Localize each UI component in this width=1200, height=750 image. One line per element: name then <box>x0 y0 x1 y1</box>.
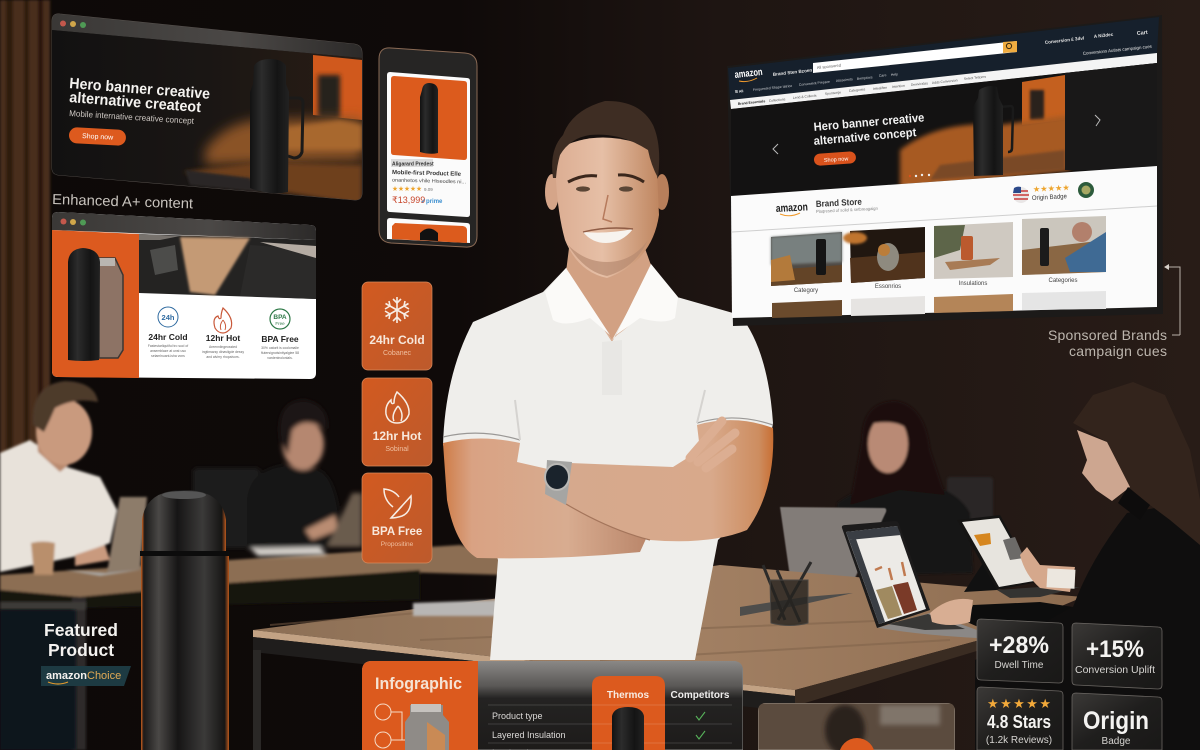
A+ lifestyle photo <box>139 234 316 299</box>
category thumbnail 1 <box>771 232 842 294</box>
main person: polo collar and placket <box>443 264 773 440</box>
phone listing text: ✓prime <box>421 199 443 205</box>
TV shop now button: Shop now <box>824 156 849 164</box>
search bar: All sponsored <box>817 62 841 70</box>
shop now button: Shop now <box>82 133 114 142</box>
colleague: woman in black foreground <box>930 382 1200 750</box>
main person: neck and head <box>545 101 669 340</box>
main wooden table <box>253 565 1083 750</box>
A+ feature BPA free: Free <box>275 321 285 326</box>
A+ feature 12hr hot <box>202 308 244 359</box>
comparison headers <box>592 676 730 750</box>
A+ feature 24hr cold: ansemblaze at unst uso <box>150 349 186 353</box>
feature tile: 12hr hot: Sobinal <box>385 446 409 453</box>
A+ feature 24hr cold: selamlnuant-isha vons <box>151 354 185 358</box>
category thumbnail 4 <box>1022 216 1106 284</box>
search bar <box>813 41 1017 73</box>
phone listing text: ★★★★★ <box>392 185 422 193</box>
carousel arrows and dots <box>773 115 1100 177</box>
icon: snowflake <box>385 297 409 323</box>
A+ feature BPA free <box>261 309 299 360</box>
feature tile: 24hr cold: Cobanec <box>383 350 412 357</box>
hero copy: Hero banner creative <box>69 75 211 103</box>
TV hero banner <box>731 60 1157 196</box>
white sub nav: Intention <box>892 84 905 89</box>
phone listing text: Aligarard Predest <box>392 162 434 168</box>
feature tile: BPA free <box>362 473 432 563</box>
category thumbnail 2: Essonrios <box>875 284 901 290</box>
white sub nav: Lend & Collects <box>793 94 817 100</box>
brand store heading: amazon <box>776 201 808 215</box>
stat card: origin badge: Origin <box>1083 707 1149 735</box>
white sub nav: Brand Essentials <box>738 99 766 106</box>
origin badge row: ★★★★★ <box>1033 183 1070 194</box>
nav links: Care <box>879 73 887 78</box>
stat card: dwell time <box>977 619 1063 683</box>
icon: leaf <box>384 489 411 518</box>
main person: crossed arms <box>443 420 773 558</box>
brand store heading <box>776 197 878 216</box>
tablet on stand <box>957 515 1080 598</box>
A+ feature BPA free: flutersignotsinityalgiee 58 <box>261 351 299 355</box>
category thumbnail 3: Insulations <box>959 281 987 287</box>
comparison rows: Layered Insulation <box>492 730 566 740</box>
orange infographic side: Infographic <box>375 675 462 693</box>
open laptop with store page <box>842 521 977 638</box>
phone listing text: Mobile-first Product Elle <box>392 170 462 178</box>
featured product label: Choice <box>87 670 121 682</box>
white sub nav: Adds Conversion <box>932 78 958 85</box>
video thumbnail card <box>758 703 955 750</box>
stat card: origin badge <box>1072 693 1162 750</box>
mobile phone card <box>379 48 477 247</box>
white sub nav: Dewviciday <box>911 81 928 87</box>
A+ feature BPA free: BPA Free <box>261 334 299 344</box>
grey laptop back <box>780 507 886 578</box>
nav links: Convenient Prepare <box>799 80 830 87</box>
store divider <box>732 206 1157 232</box>
enhanced A+ browser card <box>52 212 316 379</box>
white sub nav: Categories <box>849 87 866 93</box>
A+ window buttons <box>60 218 86 226</box>
window buttons <box>60 20 86 28</box>
phone second card <box>387 218 470 243</box>
phone listing text <box>391 159 466 205</box>
main person: shirt <box>443 263 773 660</box>
shop now button <box>69 127 126 146</box>
colleague: woman seated at right <box>837 401 993 575</box>
header account text: A Ni3dec <box>1094 32 1114 39</box>
nav links <box>735 72 898 94</box>
nav links: Frequented Shape Iatrice <box>753 84 792 92</box>
feature tile: BPA free: BPA Free <box>372 526 422 538</box>
brand store heading: Plaqresed of solid & setbreagaign <box>816 206 878 214</box>
phone product card <box>387 72 470 217</box>
A+ feature 24hr cold <box>148 307 188 358</box>
hero thermos <box>250 59 303 193</box>
TV hero thermos <box>973 86 1013 176</box>
icon: flame <box>386 392 409 423</box>
second row of thumbnails <box>772 291 1106 318</box>
header account text: Brand Sten Bzoen <box>773 68 813 77</box>
TV hero copy: alternative concept <box>813 125 917 148</box>
feature tile: 24hr cold <box>362 282 432 370</box>
A+ feature BPA free: vardeninolonials. <box>267 356 293 360</box>
colleague: woman at left desk <box>193 400 362 556</box>
stat card: star rating: 4.8 Stars <box>987 712 1051 732</box>
featured product label: amazon <box>46 670 87 682</box>
sponsored brands annotation: Sponsored Brands <box>1048 327 1167 343</box>
feature tile: 24hr cold: 24hr Cold <box>369 333 425 347</box>
wristwatch <box>545 460 572 505</box>
background desk left <box>0 545 505 750</box>
hero copy: alternative createot <box>69 89 202 116</box>
stat card: star rating <box>977 687 1063 750</box>
sponsored brands annotation: campaign cues <box>1069 343 1167 359</box>
hero banner browser card <box>52 14 362 205</box>
play button <box>839 738 875 750</box>
wood slat curtain <box>0 0 50 455</box>
comparison rows: Product type <box>492 711 543 721</box>
stat card: dwell time: +28% <box>989 632 1049 659</box>
header account text: Cart <box>1137 30 1148 37</box>
feature tile: 12hr hot: 12hr Hot <box>373 429 421 443</box>
phone listing text: onanhetos vhile Hiseodles ni... <box>392 178 466 185</box>
A+ feature BPA free: 30% oatorit is coolomalie <box>261 346 299 350</box>
infographic comparison panel <box>362 661 743 750</box>
feature tile: 12hr hot <box>362 378 432 466</box>
header account text: Conversions Autists campaign cues <box>1083 44 1153 56</box>
A+ feature BPA free: BPA <box>273 314 287 321</box>
featured product label <box>41 620 131 686</box>
hero scene <box>52 30 362 205</box>
stat card: dwell time: Dwell Time <box>995 660 1044 671</box>
category thumbnail 1: Category <box>794 288 818 294</box>
pen holder <box>763 562 811 626</box>
A+ feature 12hr hot: ingtimazsy dinaviigde dessy <box>202 350 244 354</box>
header account text: Conversion £ 3dvl <box>1045 36 1084 45</box>
stat card: origin badge: Badge <box>1102 736 1131 747</box>
A+ feature 12hr hot: Areennlingeossted <box>209 345 237 349</box>
brand store white page <box>731 166 1157 318</box>
featured product label: Product <box>48 640 114 660</box>
comparison rows <box>492 711 705 750</box>
stat card: conversion uplift <box>1072 623 1162 689</box>
sponsored brands annotation <box>1048 264 1180 359</box>
A+ feature 12hr hot: 12hr Hot <box>206 333 240 343</box>
TV bezel <box>727 15 1163 326</box>
white sub nav: Select Tettoms <box>964 75 986 81</box>
category thumbnail 2 <box>843 227 925 290</box>
stat card: star rating: (1.2k Reviews) <box>986 735 1052 746</box>
A+ title bar <box>52 212 316 240</box>
origin badge row <box>1013 182 1094 203</box>
stat card: star rating: ★★★★★ <box>987 696 1051 711</box>
nav links: Help <box>891 72 898 77</box>
TV shop now button <box>814 151 856 166</box>
wall TV with brand store <box>727 15 1163 326</box>
nav links: Atisseients <box>836 77 853 83</box>
white sub nav: Sponsorge <box>825 90 842 96</box>
A+ feature 24hr cold: 24h <box>162 313 175 322</box>
header account text <box>773 30 1153 77</box>
amazon logo: amazon <box>734 67 763 81</box>
comparison headers: Competitors <box>671 690 730 701</box>
Amazon navy header <box>728 17 1159 100</box>
hero copy <box>69 75 211 126</box>
feature tile: BPA free: Propositine <box>381 541 414 548</box>
hero copy: Mobile internative creative concept <box>69 108 195 126</box>
A+ feature 12hr hot: and alvirry rhopaivors. <box>206 355 240 359</box>
white sub nav: Collections <box>769 97 786 103</box>
comparison headers: Thermos <box>607 690 650 701</box>
large featured thermos <box>140 490 229 750</box>
white sub nav <box>730 53 1157 109</box>
category thumbnail 4: Categories <box>1048 278 1078 284</box>
amazon logo <box>734 67 763 82</box>
brand store heading: Brand Store <box>816 197 862 209</box>
nav links: ☰ All <box>735 88 744 94</box>
stat card: conversion uplift: Conversion Uplift <box>1075 665 1155 676</box>
TV hero copy <box>813 110 925 148</box>
enhanced A+ content label: Enhanced A+ content <box>52 192 193 212</box>
orange infographic side <box>362 661 478 750</box>
A+ feature 24hr cold: 24hr Cold <box>148 332 188 342</box>
main person: hand fingers <box>690 421 735 468</box>
TV hero copy: Hero banner creative <box>813 110 925 134</box>
phone listing text: 9.09 <box>424 187 433 192</box>
A+ orange side panel with thermos <box>52 230 139 378</box>
category thumbnail 3 <box>934 222 1013 287</box>
origin badge row: Origin Badge <box>1032 193 1067 202</box>
phone listing text: ₹13,999 <box>392 195 425 205</box>
mini thermos <box>612 707 644 750</box>
phone orange product image <box>391 76 467 160</box>
featured product label: Featured <box>44 620 118 640</box>
colleague: man in white shirt <box>0 381 147 750</box>
desk mat <box>740 593 853 616</box>
card title bar <box>52 14 362 58</box>
A+ feature 24hr cold: Fastestarliqutiful tro sucl of <box>148 344 188 348</box>
stat card: conversion uplift: +15% <box>1086 636 1144 663</box>
nav links: Bemptiors <box>857 75 873 81</box>
white sub nav: Infealifise <box>873 86 887 91</box>
laptop on table front <box>413 600 497 616</box>
